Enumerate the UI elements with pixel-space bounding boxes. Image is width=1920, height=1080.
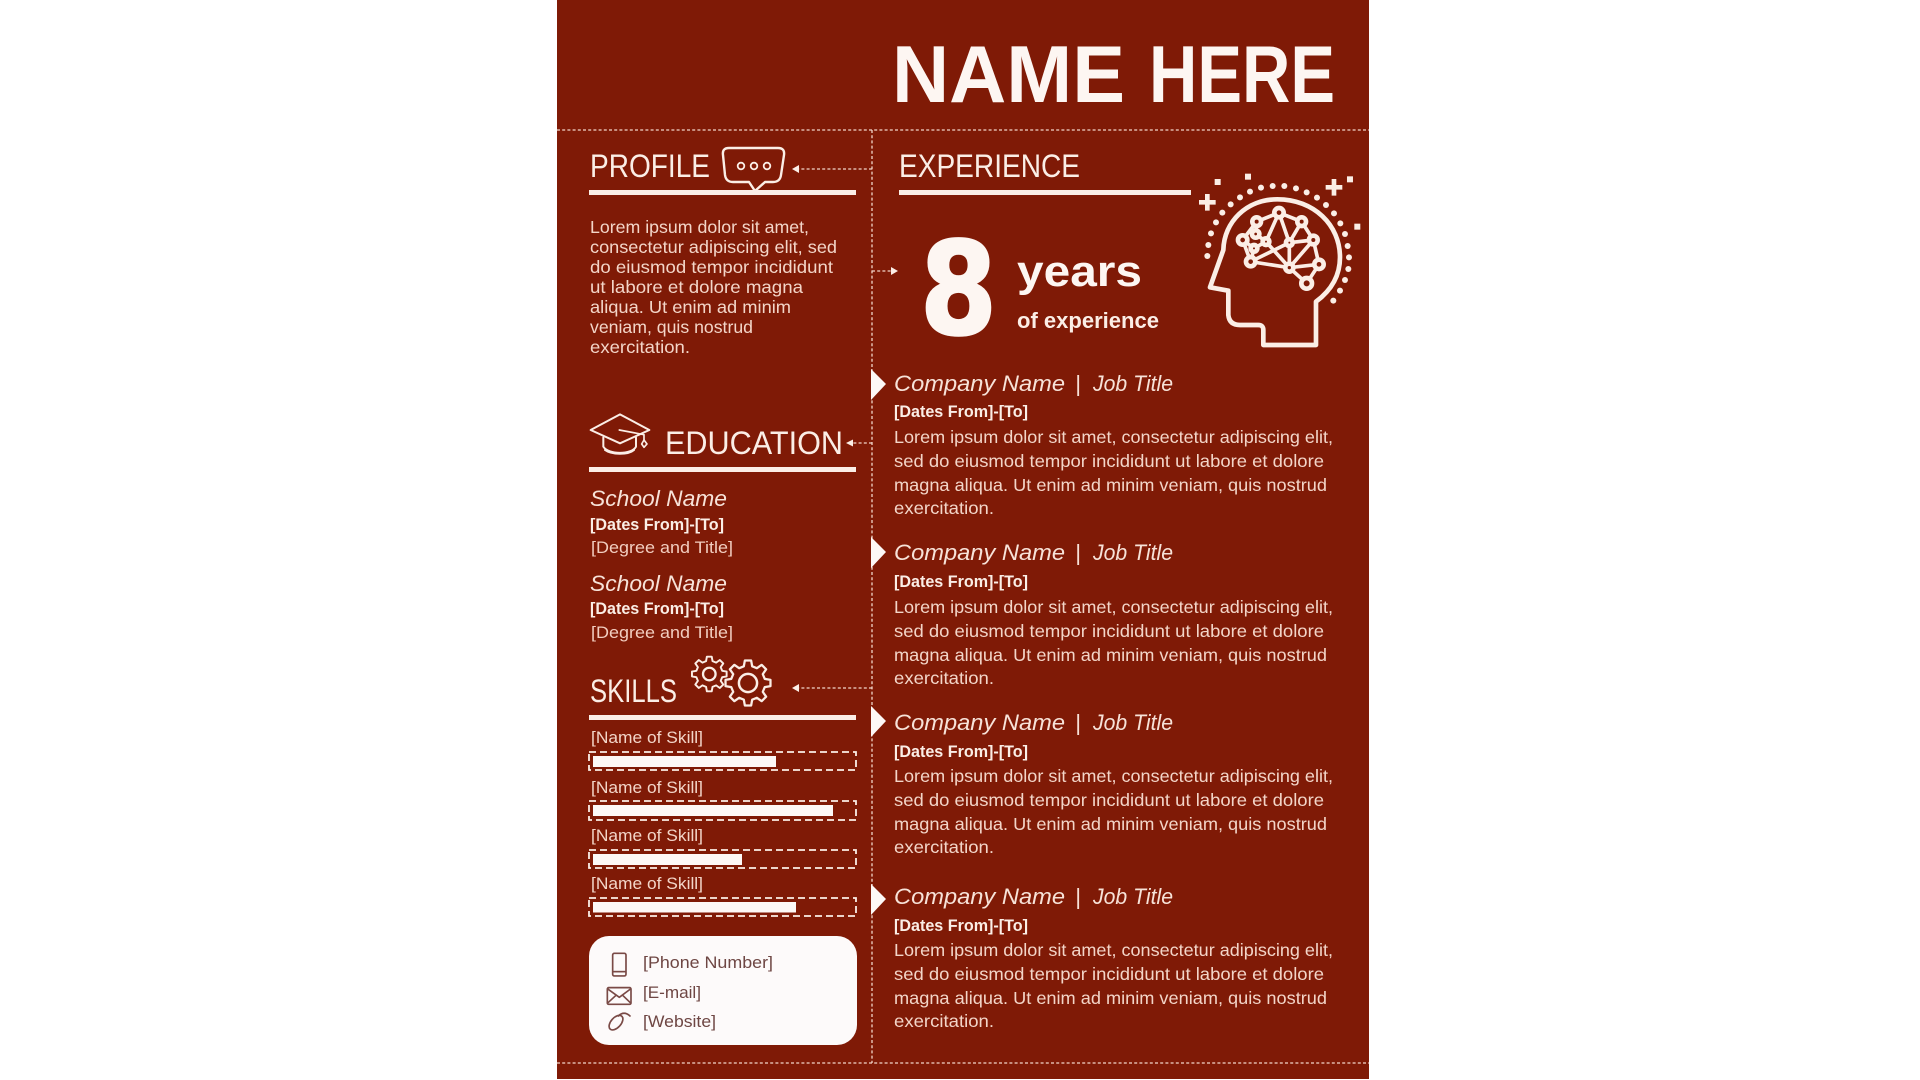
job title line: Company Name <box>894 540 1065 565</box>
profile text block: consectetur adipiscing elit, sed <box>590 237 837 257</box>
profile text block: aliqua. Ut enim ad minim <box>590 297 791 317</box>
panel: education <box>589 414 872 642</box>
experience entry 2 <box>871 537 1333 688</box>
panel: resume background <box>557 0 1369 1079</box>
skills heading rule <box>589 715 856 720</box>
profile text block: do eiusmod tempor incididunt <box>590 257 833 277</box>
job title line: Job Title <box>1092 371 1173 396</box>
heading: experience: EXPERIENCE <box>899 148 1080 184</box>
description: exercitation. <box>894 668 994 688</box>
panel: profile <box>589 148 872 357</box>
icon: head with brain network <box>1199 174 1360 345</box>
dates: [Dates From]-[To] <box>894 743 1028 761</box>
skill 3: [Name of Skill] <box>591 827 703 845</box>
school entry 1 <box>590 486 733 557</box>
job title line: Company Name <box>894 884 1065 909</box>
description: Lorem ipsum dolor sit amet, consectetur adipiscing elit, <box>894 766 1333 786</box>
school entry 2: [Degree and Title] <box>591 623 733 642</box>
arrow: to education <box>846 440 872 446</box>
stat: 8 years of experience <box>920 216 1159 364</box>
skill 4: [Name of Skill] <box>591 875 703 893</box>
school entry 1: School Name <box>590 486 727 511</box>
profile text block: exercitation. <box>590 337 690 357</box>
icon: mouse <box>606 1013 630 1032</box>
job title line: | <box>1075 884 1081 909</box>
arrow: to skills <box>792 684 872 692</box>
icon: graduation cap <box>591 414 649 454</box>
job title line: | <box>1075 710 1081 735</box>
job title line: Company Name <box>894 371 1065 396</box>
arrow marker <box>871 884 886 915</box>
description <box>894 427 1333 518</box>
title: HERE <box>1149 30 1335 120</box>
description <box>894 597 1333 688</box>
description: sed do eiusmod tempor incididunt ut labore et dolore <box>894 451 1324 471</box>
school entry 2 <box>590 571 733 642</box>
icon: speech bubble <box>723 148 784 191</box>
arrow marker <box>871 706 886 737</box>
description: magna aliqua. Ut enim ad minim veniam, quis nostrud <box>894 988 1327 1008</box>
job title line <box>894 371 1173 396</box>
description: sed do eiusmod tempor incididunt ut labore et dolore <box>894 621 1324 641</box>
description: sed do eiusmod tempor incididunt ut labore et dolore <box>894 964 1324 984</box>
skill 2 <box>589 779 856 820</box>
description: Lorem ipsum dolor sit amet, consectetur adipiscing elit, <box>894 427 1333 447</box>
layout dashed dividers <box>557 130 1369 1063</box>
experience heading rule <box>899 190 1191 195</box>
job title line <box>894 540 1173 565</box>
dates: [Dates From]-[To] <box>894 403 1028 421</box>
description <box>894 766 1333 857</box>
school entry 2: [Dates From]-[To] <box>590 600 724 618</box>
skill 3 <box>589 827 856 868</box>
skill 2: [Name of Skill] <box>591 779 703 797</box>
description: magna aliqua. Ut enim ad minim veniam, quis nostrud <box>894 645 1327 665</box>
description: magna aliqua. Ut enim ad minim veniam, quis nostrud <box>894 814 1327 834</box>
phone text: [Phone Number] <box>643 953 773 972</box>
panel: experience header <box>872 148 1360 364</box>
dates: [Dates From]-[To] <box>894 573 1028 591</box>
heading: profile: PROFILE <box>590 148 710 184</box>
icon: envelope <box>607 988 631 1004</box>
job title line: Job Title <box>1092 540 1173 565</box>
school entry 2: School Name <box>590 571 727 596</box>
description: exercitation. <box>894 498 994 518</box>
arrow marker <box>871 369 886 400</box>
skill 1 <box>589 729 856 770</box>
heading: education: EDUCATION <box>665 425 843 461</box>
profile text block: veniam, quis nostrud <box>590 317 753 337</box>
panel: contact card <box>589 936 857 1045</box>
dates: [Dates From]-[To] <box>894 917 1028 935</box>
panel: skills <box>589 657 872 916</box>
skill 1: [Name of Skill] <box>591 729 703 747</box>
description: sed do eiusmod tempor incididunt ut labore et dolore <box>894 790 1324 810</box>
arrow marker <box>871 537 886 568</box>
description: exercitation. <box>894 1011 994 1031</box>
icon: gears <box>692 657 770 705</box>
description: magna aliqua. Ut enim ad minim veniam, quis nostrud <box>894 475 1327 495</box>
job title line: | <box>1075 371 1081 396</box>
experience entry 1 <box>871 369 1333 518</box>
job title line <box>894 710 1173 735</box>
profile heading rule <box>589 190 856 195</box>
profile text block <box>590 217 837 357</box>
icon: phone <box>613 953 626 976</box>
job title line: Company Name <box>894 710 1065 735</box>
job title line: | <box>1075 540 1081 565</box>
description: exercitation. <box>894 837 994 857</box>
education heading rule <box>589 467 856 472</box>
skill 4 <box>589 875 856 916</box>
description <box>894 940 1333 1031</box>
arrow: to years <box>872 267 898 275</box>
experience entry 3 <box>871 706 1333 857</box>
title: NAME <box>892 30 1125 120</box>
website text: [Website] <box>643 1012 716 1031</box>
job title line: Job Title <box>1092 710 1173 735</box>
title <box>892 30 1335 120</box>
job title line: Job Title <box>1092 884 1173 909</box>
stat: 8 years of experience: years <box>1017 247 1142 296</box>
school entry 1: [Dates From]-[To] <box>590 516 724 534</box>
stat: 8 years of experience: 8 <box>920 216 997 364</box>
school entry 1: [Degree and Title] <box>591 538 733 557</box>
profile text block: ut labore et dolore magna <box>590 277 803 297</box>
job title line <box>894 884 1173 909</box>
experience entry 4 <box>871 884 1333 1031</box>
stat: 8 years of experience: of experience <box>1017 308 1159 333</box>
email text: [E-mail] <box>643 983 701 1002</box>
description: Lorem ipsum dolor sit amet, consectetur adipiscing elit, <box>894 597 1333 617</box>
arrow: to profile <box>792 165 872 173</box>
profile text block: Lorem ipsum dolor sit amet, <box>590 217 809 237</box>
heading: skills: SKILLS <box>590 673 677 709</box>
description: Lorem ipsum dolor sit amet, consectetur adipiscing elit, <box>894 940 1333 960</box>
